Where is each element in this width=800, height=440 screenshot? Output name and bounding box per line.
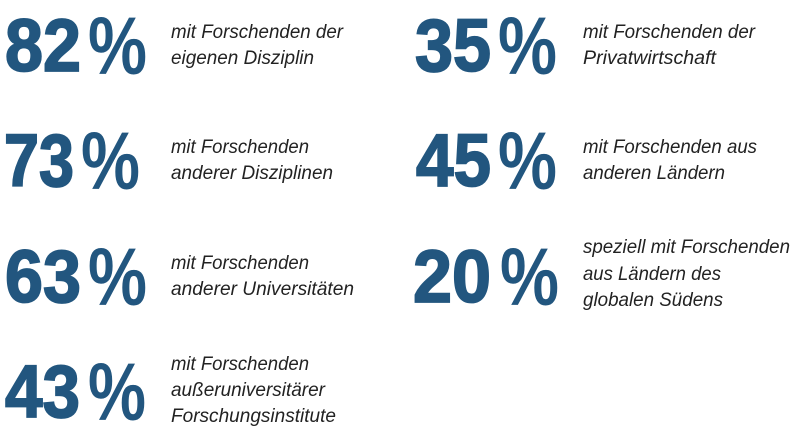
stat: 45% other countries xyxy=(416,116,757,207)
stat: 73% other disciplines: anderer Disziplinen xyxy=(171,162,333,184)
stat: 73% other disciplines: mit Forschenden xyxy=(171,136,309,158)
stat: 20% global south: speziell mit Forschenden xyxy=(583,236,790,258)
stat: 35% private sector xyxy=(415,1,756,92)
stat: 20% global south: aus Ländern des xyxy=(583,263,721,285)
stat: 82% own discipline: mit Forschenden der xyxy=(171,21,344,43)
stat: 73% other disciplines xyxy=(4,116,333,207)
stat: 35% private sector: mit Forschenden der xyxy=(583,21,756,43)
stat: 20% global south xyxy=(413,232,790,323)
stat: 45% other countries: mit Forschenden aus xyxy=(583,136,757,158)
stat: 63% other universities: anderer Universitäten xyxy=(171,278,354,300)
stat: 73% other disciplines: % xyxy=(81,116,140,207)
stat: 35% private sector: % xyxy=(498,1,557,92)
stat: 35% private sector: 35 xyxy=(415,4,491,87)
stat: 82% own discipline xyxy=(5,1,344,92)
stat: 43% non-university institutes: % xyxy=(88,347,146,438)
stat: 20% global south: % xyxy=(500,232,559,323)
stat: 45% other countries: anderen Ländern xyxy=(583,162,725,184)
stat: 43% non-university institutes: 43 xyxy=(5,350,80,433)
stat: 20% global south: globalen Südens xyxy=(583,289,723,311)
stat: 35% private sector: Privatwirtschaft xyxy=(583,47,718,69)
stat: 63% other universities xyxy=(5,232,354,323)
stat: 45% other countries: 45 xyxy=(416,119,491,202)
stat: 82% own discipline: eigenen Disziplin xyxy=(171,47,314,69)
stat: 82% own discipline: % xyxy=(88,1,147,92)
stat: 43% non-university institutes: außeruniversitärer xyxy=(171,379,326,401)
stat: 63% other universities: mit Forschenden xyxy=(171,252,309,274)
stat: 20% global south: 20 xyxy=(413,235,491,318)
stat: 63% other universities: % xyxy=(88,232,147,323)
stat: 82% own discipline: 82 xyxy=(5,4,81,87)
stat: 43% non-university institutes: Forschungsinstitute xyxy=(171,405,336,427)
stat: 63% other universities: 63 xyxy=(5,235,81,318)
stat: 45% other countries: % xyxy=(498,116,557,207)
stat: 43% non-university institutes xyxy=(5,347,336,438)
stat: 43% non-university institutes: mit Forschenden xyxy=(171,353,309,375)
stat: 73% other disciplines: 73 xyxy=(4,119,74,202)
